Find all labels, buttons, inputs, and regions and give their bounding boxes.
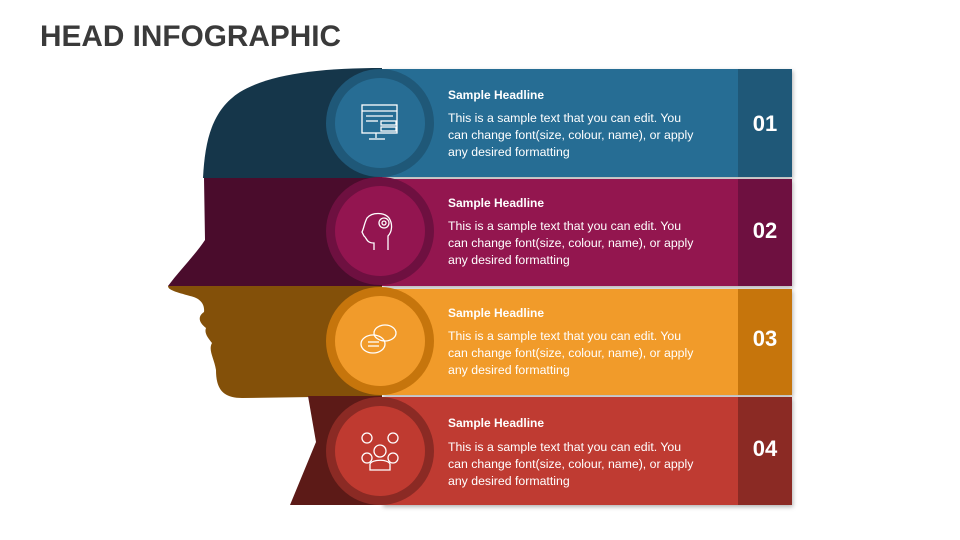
panel 2: any desired formatting xyxy=(448,253,570,267)
panel 3: can change font(size, colour, name), or apply xyxy=(448,346,694,360)
title: HEAD INFOGRAPHIC xyxy=(40,20,341,53)
panel 1: 01 xyxy=(753,111,777,136)
panel 1: can change font(size, colour, name), or apply xyxy=(448,128,694,142)
panel 3: Sample Headline xyxy=(448,306,544,320)
panel 1: any desired formatting xyxy=(448,145,570,159)
icon: head with gear xyxy=(362,214,392,250)
panel 3: This is a sample text that you can edit. You xyxy=(448,329,681,343)
panel 2: This is a sample text that you can edit. You xyxy=(448,219,681,233)
panel 3: any desired formatting xyxy=(448,363,570,377)
panel 3: 03 xyxy=(753,326,777,351)
panel 4: any desired formatting xyxy=(448,474,570,488)
panel 3 xyxy=(326,287,792,395)
panel 4: Sample Headline xyxy=(448,416,544,430)
panel 4: 04 xyxy=(753,436,778,461)
panel 1: Sample Headline xyxy=(448,88,544,102)
panel 1 xyxy=(326,69,792,177)
panel 4: can change font(size, colour, name), or apply xyxy=(448,457,694,471)
panel 2: 02 xyxy=(753,218,777,243)
panel 2 xyxy=(326,177,792,286)
panel 1: This is a sample text that you can edit. You xyxy=(448,111,681,125)
panel 4: This is a sample text that you can edit. You xyxy=(448,440,681,454)
icon: chat bubbles xyxy=(361,325,396,353)
icon: monitor code xyxy=(362,105,397,139)
head silhouette xyxy=(168,68,382,505)
panel 4 xyxy=(326,397,792,505)
panel 2: Sample Headline xyxy=(448,196,544,210)
icon: person with idea bulbs xyxy=(362,433,398,470)
panel 2: can change font(size, colour, name), or apply xyxy=(448,236,694,250)
